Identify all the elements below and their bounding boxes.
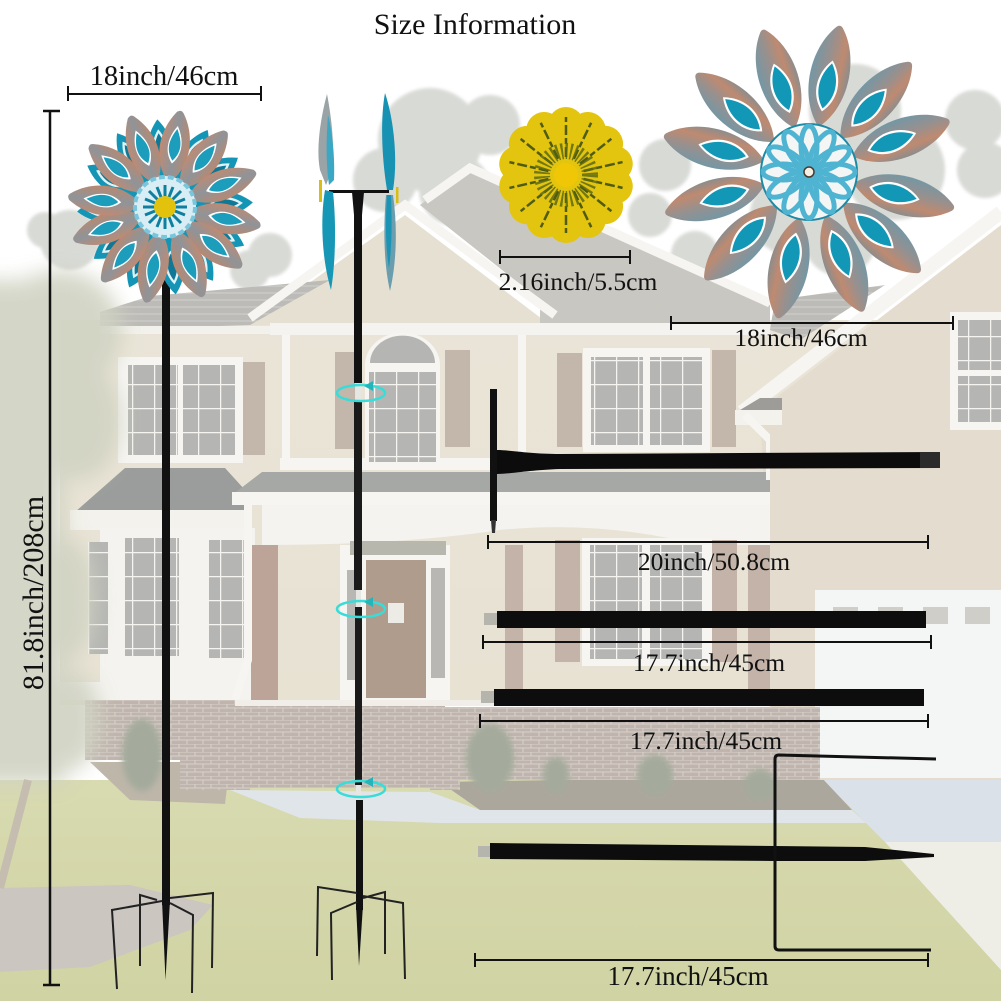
lawn [0,780,1001,1001]
rotation arrow 2 [337,597,385,617]
tree trunk [0,780,28,888]
driveway upper [822,778,1001,842]
upper floor trim [280,458,540,470]
side view flower left [318,94,335,290]
porch columns [251,545,278,705]
dimension: T rod [488,535,928,576]
gable and upper walls [250,215,550,325]
downspout [235,505,248,700]
door surround [340,545,450,700]
part: ground stake [478,755,936,950]
cross bar [329,190,389,193]
dimension: cap: 2.16inch/5.5cm [499,267,657,296]
upper windows [118,357,243,463]
dimension: stake: 17.7inch/45cm [607,961,769,991]
dimension: blade: 18inch/46cm [734,323,868,352]
shrubs [122,719,776,801]
front view flower [67,109,263,305]
large flower blades [659,22,959,322]
dimension: pole 2: 17.7inch/45cm [630,726,782,755]
upper-left roof [100,280,330,330]
fork base [112,893,213,993]
yellow centre cap [496,106,636,244]
metal roofs [75,468,245,515]
background trees [27,64,1001,290]
title: Size Information [374,8,576,41]
dimension: overall height: 81.8inch/208cm [17,496,50,690]
garage [770,430,1001,590]
mulch left [0,885,213,972]
part: pole 2 [481,689,924,706]
rotation arrow 1 [337,381,385,401]
dimension: pole 1: 17.7inch/45cm [633,648,785,677]
dimension: overall width: 18inch/46cm [90,61,238,92]
assembled wind spinner pole [112,235,213,993]
small gable eave right [735,410,782,425]
stake point [162,900,170,980]
mulch front bed [440,776,852,810]
fork base [317,887,405,980]
dimension: blade [671,316,953,352]
dimension: stake [475,953,928,991]
bay columns and windows [100,528,255,693]
side view pole [317,190,405,980]
part: top T rod [490,389,940,533]
dimension: T rod: 20inch/50.8cm [638,547,790,576]
walkway [230,790,866,823]
left foreground tree [0,270,122,785]
gable trim [250,205,555,318]
shutters [240,350,736,455]
dimension: overall width [68,61,261,101]
main walls [60,320,1001,705]
brick base [85,700,235,760]
rotation arrow 3 [337,777,385,797]
side view flower right [382,93,398,291]
dimension: pole 1 [483,635,931,677]
dimension: overall height [17,111,60,985]
dimension: cap [499,250,657,296]
part: pole 1 [484,611,926,628]
lower right window [582,538,712,666]
eaves and beams [232,492,778,505]
driveway lower [885,842,1001,970]
dimension: pole 2 [480,714,928,755]
